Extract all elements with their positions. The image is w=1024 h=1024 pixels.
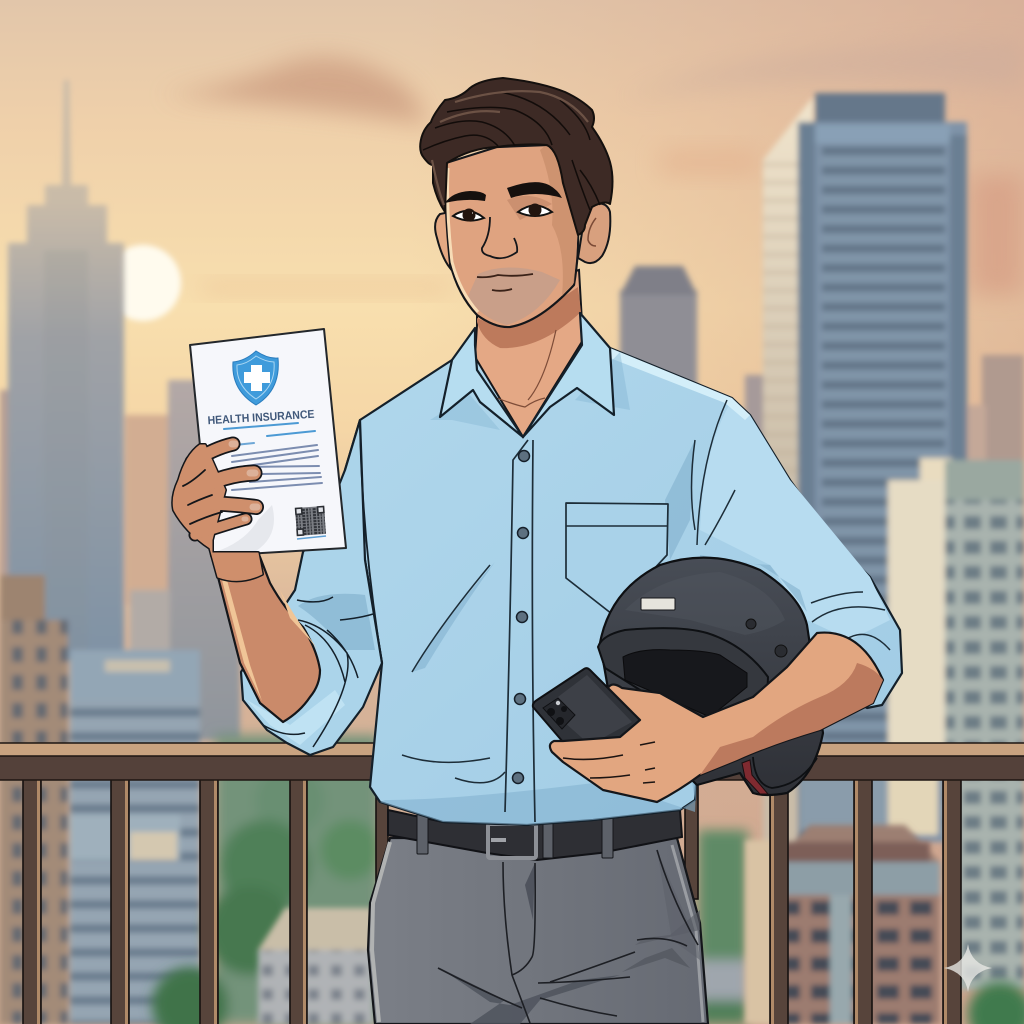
hand outline [173,444,262,580]
hair [420,78,612,235]
motorcycle helmet [598,558,823,795]
left hand [173,444,262,580]
belt [388,810,682,860]
belt buckle [488,824,536,858]
sleeve seam line [360,425,382,663]
shirt placket [505,440,535,822]
hand fill [173,444,262,580]
QR code [295,506,326,539]
insurance document [190,329,346,556]
big right tower [815,93,945,125]
nose [482,217,517,258]
right front building [920,458,952,488]
fingernails [232,444,257,519]
left forearm [218,557,320,722]
low left buildings [70,650,200,1024]
right eye [518,204,552,216]
sun [105,245,181,321]
trousers [368,838,708,1024]
left sleeve [241,420,382,755]
balcony railing [0,743,1024,1024]
right eyebrow [507,182,562,198]
document title: HEALTH INSURANCE [207,409,315,427]
sleeve highlight [700,400,890,640]
neck [475,270,583,437]
trees [152,735,1024,1024]
face shading [468,267,560,325]
left eyebrow [445,191,486,203]
left ear [435,212,450,268]
hair strands [423,92,600,210]
helmet inner edge [753,757,817,788]
right ear [578,203,610,263]
shirt pocket [566,503,668,614]
document text lines [224,423,322,490]
shield icon [233,351,278,405]
sparkle watermark [944,944,992,992]
helmet badge [641,598,675,610]
right forearm and hand [550,633,883,802]
phone [533,668,640,760]
shirt shadows [380,562,700,825]
background low buildings [258,825,940,1024]
finger creases [183,470,222,524]
mouth [477,274,533,291]
shirt torso and right sleeve [345,348,902,825]
far left tower [8,80,124,660]
left eye [453,208,484,222]
collar [440,313,614,437]
face [446,145,578,327]
helmet red strap [742,760,768,794]
head [420,78,612,327]
shirt seams and folds [402,400,890,783]
hair highlight [432,91,588,205]
